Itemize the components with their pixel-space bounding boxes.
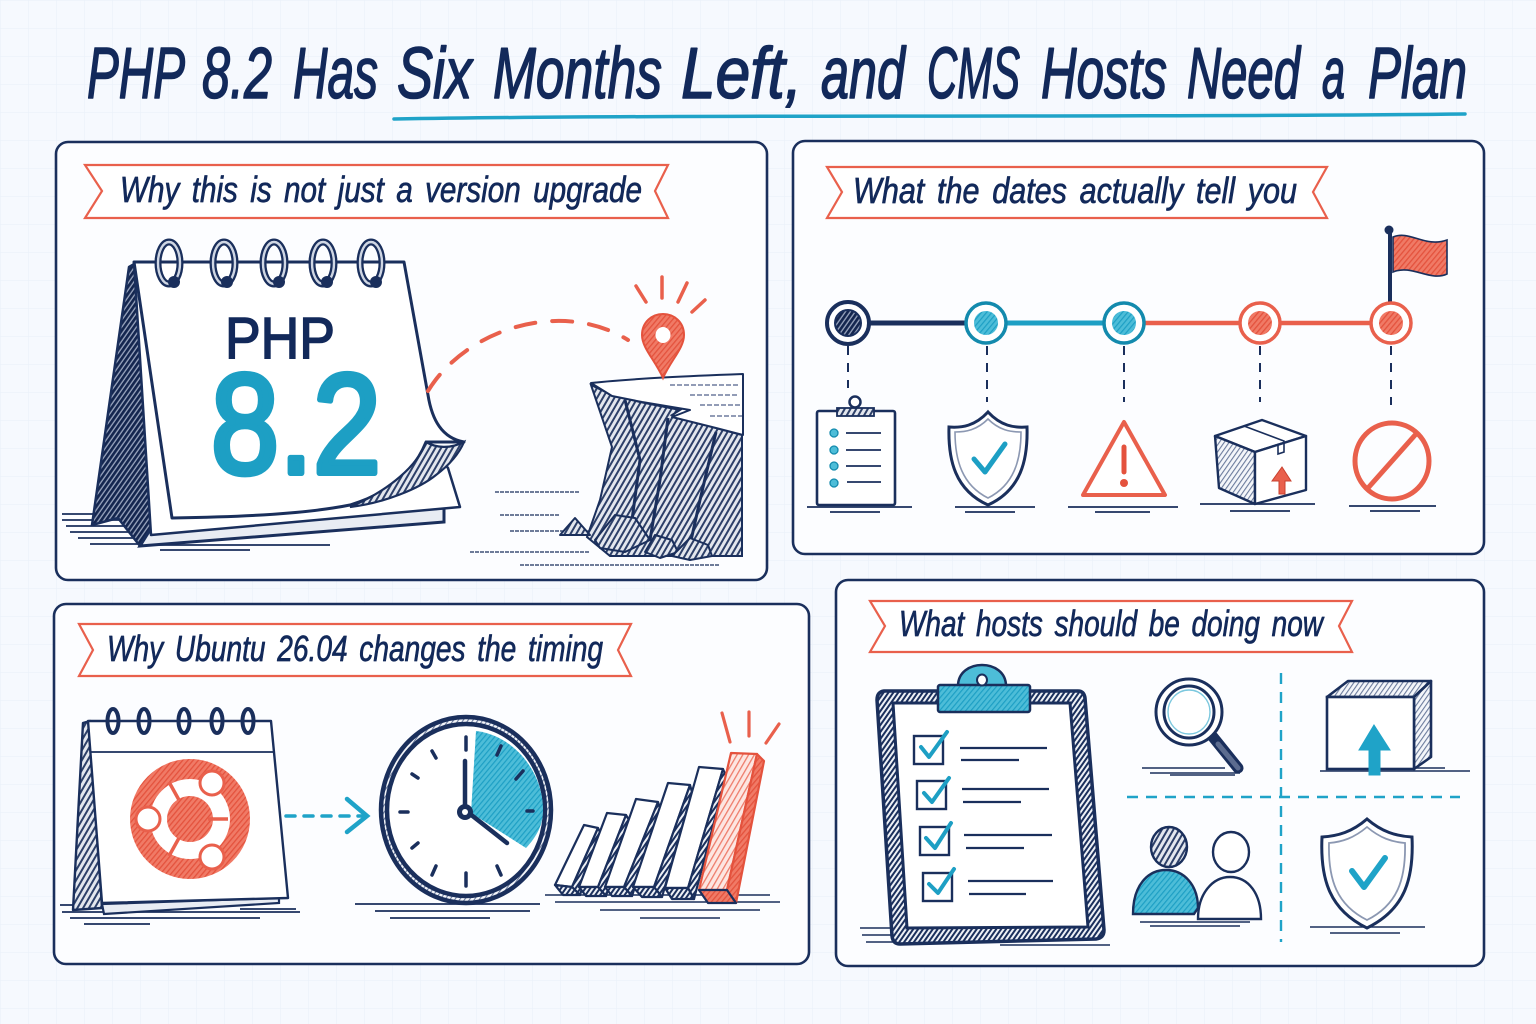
clock hands (465, 761, 507, 843)
icon: two people (1133, 827, 1261, 926)
heading ribbon: What hosts should be doing now (899, 603, 1325, 644)
attention rays (636, 277, 705, 312)
icon: shield with check (949, 412, 1027, 505)
rocks (560, 515, 712, 560)
calendar illustration (62, 242, 464, 550)
domino 3 (605, 799, 660, 896)
icon: checklist clipboard (817, 396, 895, 505)
title (87, 34, 1467, 119)
timeline (827, 226, 1447, 344)
domino 1 (555, 825, 600, 895)
milestone node 2 (966, 303, 1006, 343)
title: Need (1187, 34, 1301, 114)
calendar label 8.2: 8.2 (211, 345, 381, 504)
title: Left, (681, 34, 802, 114)
heading ribbon: Why Ubuntu 26.04 changes the timing (107, 628, 603, 669)
rings (108, 709, 254, 733)
dashed connectors (848, 346, 1391, 405)
title: Hosts (1041, 34, 1167, 114)
dashed arrow (286, 799, 367, 832)
icon: clock (355, 717, 551, 918)
icon: shield with check (1310, 819, 1425, 933)
title: Has (293, 34, 378, 114)
panel: what the dates actually tell you (793, 141, 1484, 554)
icon: prohibited sign (1355, 423, 1429, 499)
checklist rows (914, 732, 1053, 901)
icon: box with arrow (1215, 420, 1306, 504)
heading ribbon: Why this is not just a version upgrade (120, 169, 642, 210)
domino 5 (665, 767, 726, 899)
icon: Ubuntu logo (130, 759, 250, 879)
domino 2 (579, 813, 629, 896)
flag (1384, 226, 1447, 310)
icon: warning triangle (1083, 422, 1165, 495)
icon: box with upward arrow (1320, 681, 1470, 775)
impact rays (722, 712, 779, 743)
title: CMS (927, 34, 1020, 114)
icon: red location pin (636, 277, 705, 378)
dashed quadrant dividers (1127, 673, 1460, 942)
large checklist clipboard (860, 665, 1110, 945)
title: a (1322, 34, 1345, 114)
icon: magnifying glass (1142, 679, 1240, 775)
panel: why this is not just a version upgrade (56, 142, 767, 580)
heading ribbon (79, 624, 631, 676)
dashed arc arrow (428, 321, 628, 391)
heading ribbon: What the dates actually tell you (853, 170, 1297, 211)
milestone node 3 (1104, 303, 1144, 343)
calendar with Ubuntu logo (60, 709, 300, 924)
title: Months (493, 34, 662, 114)
calendar label PHP: PHP (225, 306, 335, 371)
title underline (394, 114, 1465, 119)
title: Six (397, 34, 474, 114)
spiral rings (158, 242, 382, 288)
title: Plan (1368, 34, 1467, 114)
domino 4 (633, 783, 692, 897)
milestone node 5 (1371, 303, 1411, 343)
blue quarter wedge (471, 731, 543, 848)
milestone node 1 (827, 302, 869, 344)
title: and (821, 34, 906, 114)
falling dominoes (545, 712, 780, 918)
milestone node 4 (1240, 303, 1280, 343)
title: PHP (87, 34, 185, 114)
clip (938, 665, 1030, 712)
title: 8.2 (202, 34, 272, 114)
domino 6 red (699, 753, 764, 903)
panel: what hosts should be doing now (836, 580, 1484, 966)
ground shadows (807, 504, 1436, 512)
heading ribbon (85, 165, 668, 218)
panel: why Ubuntu 26.04 changes the timing (54, 604, 809, 964)
heading ribbon (870, 601, 1352, 652)
icon: cliff (470, 374, 743, 565)
